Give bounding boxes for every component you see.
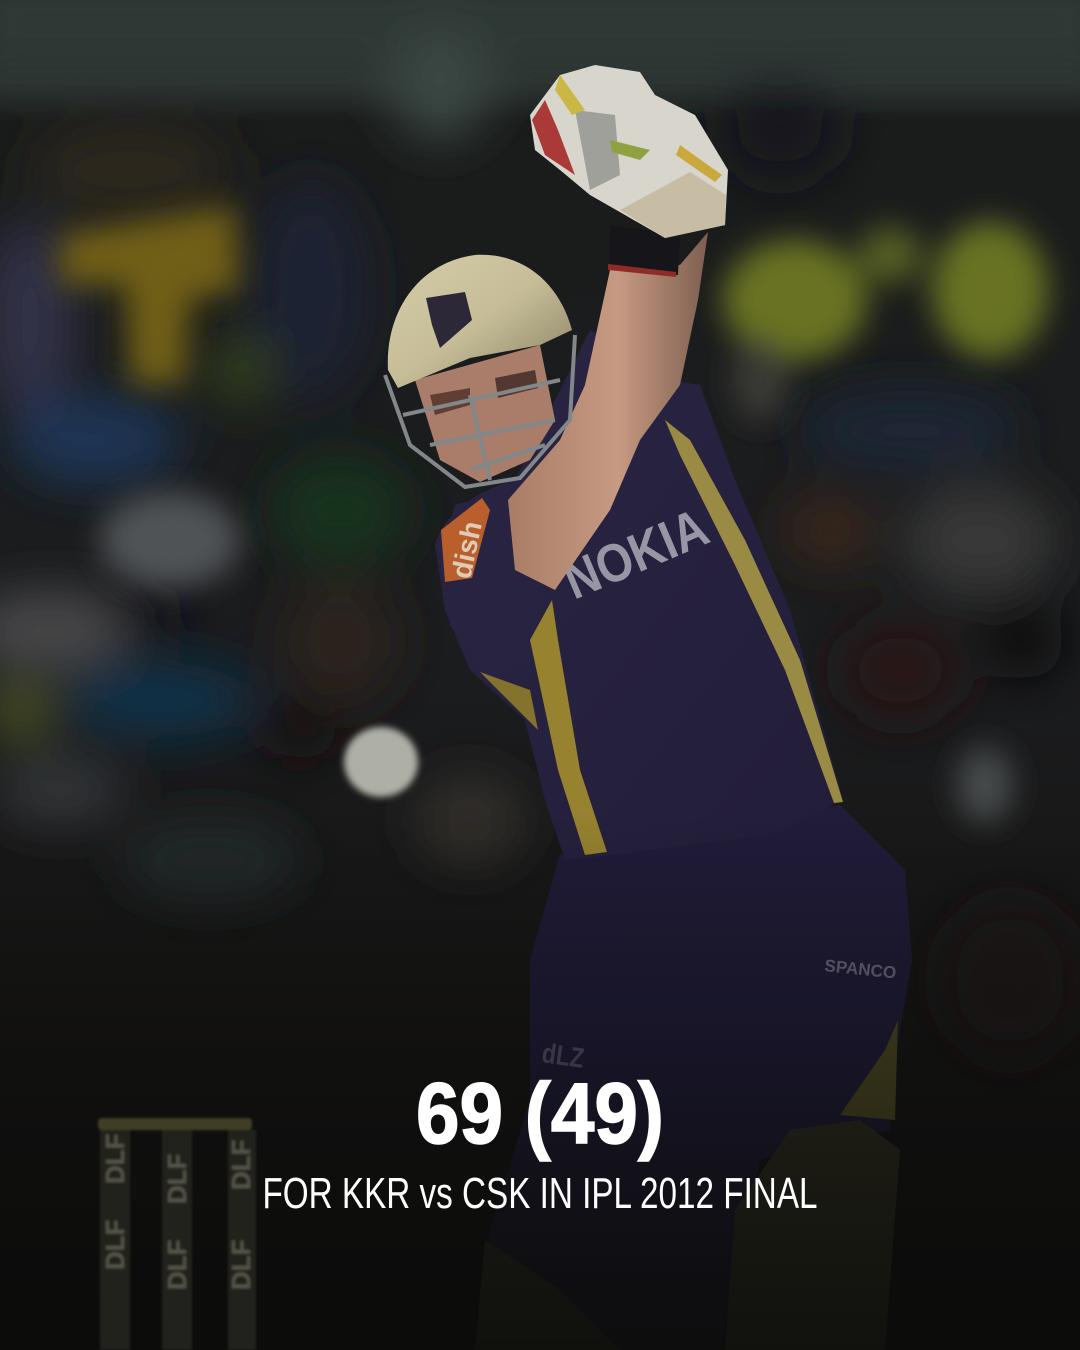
leg pads [725,1120,900,1350]
glove [530,65,728,238]
shirt sponsor: NOKIA [555,497,717,611]
subtitle: FOR KKR vs CSK IN IPL 2012 FINAL [262,1169,818,1218]
trousers [480,805,912,1350]
ball [344,727,418,797]
gold side stripes [665,420,843,803]
stumps with DLF branding: DLF [162,1239,192,1290]
stumps with DLF branding: DLF [100,1133,130,1184]
stumps with DLF branding [98,1118,256,1350]
arm [508,232,708,590]
helmet [388,255,572,388]
wristband [610,225,680,275]
shoulder sleeve [438,490,545,680]
stumps with DLF branding: DLF [226,1239,256,1290]
stumps with DLF branding: DLF [100,1219,130,1270]
helmet visor and grille [385,335,575,487]
sponsor patch [441,498,490,582]
helmet crest [426,292,472,348]
face [415,345,555,482]
player: batsman [385,65,912,1350]
shirt [435,330,843,860]
sponsor on trousers: SPANCO [824,956,897,983]
stumps with DLF branding: DLF [162,1153,192,1204]
player: batsman: dLZ [540,1037,586,1074]
headline score: 69 (49) [416,1066,664,1162]
player: batsman: dish [446,518,488,581]
stumps with DLF branding: DLF [226,1139,256,1190]
